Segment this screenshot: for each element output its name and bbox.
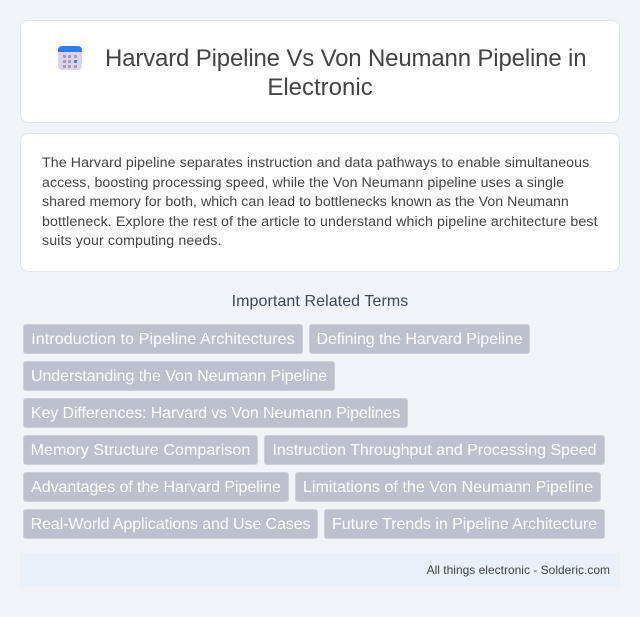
tag: Key Differences: Harvard vs Von Neumann Pipelines xyxy=(31,405,400,422)
tag: Real-World Applications and Use Cases xyxy=(31,516,310,533)
tag: Memory Structure Comparison xyxy=(31,442,250,459)
intro text: access, boosting processing speed, while the Von Neumann pipeline uses a single xyxy=(42,174,564,190)
intro text: shared memory for both, which can lead to bottlenecks known as the Von Neumann xyxy=(42,194,569,210)
tag xyxy=(264,435,605,465)
panel: related terms tags xyxy=(23,324,605,539)
panel: title card xyxy=(20,20,620,123)
intro text: The Harvard pipeline separates instruction and data pathways to enable simultaneous xyxy=(42,155,589,171)
icon: calendar xyxy=(58,46,82,70)
tag: Limitations of the Von Neumann Pipeline xyxy=(303,479,593,496)
tag xyxy=(309,324,530,354)
heading: important related terms: Important Related Terms xyxy=(232,293,408,310)
tag: Understanding the Von Neumann Pipeline xyxy=(31,368,327,385)
tag xyxy=(23,361,335,391)
footer bar xyxy=(20,553,620,587)
intro text xyxy=(42,155,598,249)
tag xyxy=(295,472,601,502)
tag xyxy=(324,509,605,539)
tag xyxy=(23,435,258,465)
tag: Introduction to Pipeline Architectures xyxy=(31,331,295,348)
tag xyxy=(23,509,318,539)
panel: introduction card xyxy=(20,133,620,272)
footer text: All things electronic - Solderic.com xyxy=(427,563,610,577)
intro text: bottleneck. Explore the rest of the article to understand which pipeline architecture best xyxy=(42,214,598,230)
title xyxy=(105,45,586,101)
tag xyxy=(23,398,408,428)
tag: Defining the Harvard Pipeline xyxy=(316,331,523,348)
tag xyxy=(23,472,289,502)
tag: Future Trends in Pipeline Architecture xyxy=(332,516,597,533)
title: Electronic xyxy=(267,74,373,101)
intro text: suits your computing needs. xyxy=(42,233,222,249)
title: Harvard Pipeline Vs Von Neumann Pipeline in xyxy=(105,45,586,72)
tag: Instruction Throughput and Processing Speed xyxy=(273,442,596,459)
tag xyxy=(23,324,303,354)
tag: Advantages of the Harvard Pipeline xyxy=(31,479,281,496)
